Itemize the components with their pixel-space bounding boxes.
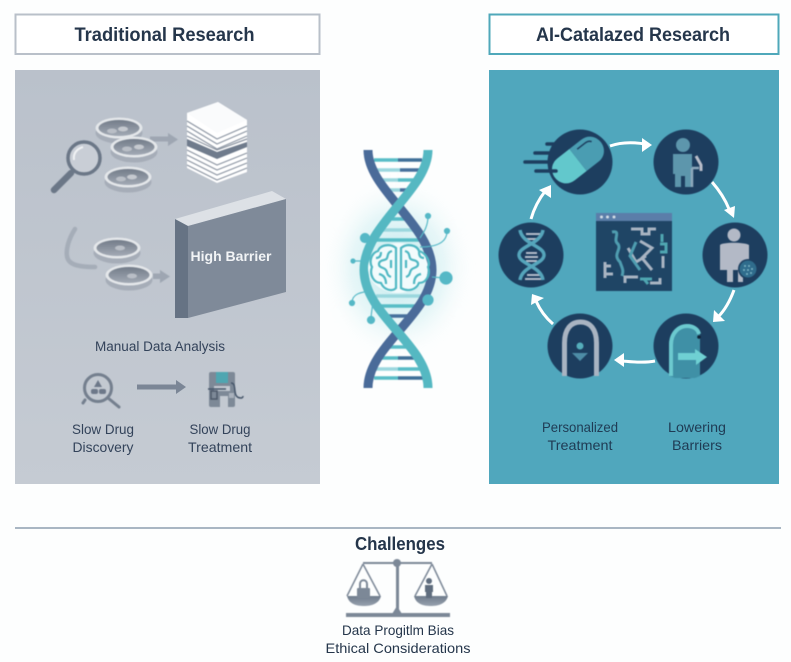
heading: Traditional Research bbox=[16, 14, 320, 54]
icon: DNA bbox=[498, 222, 564, 288]
icon: personalized treatment arch bbox=[548, 314, 612, 378]
icon: petri dishes and magnifier bbox=[54, 118, 178, 192]
label: Slow Drug Treatment: Treatment bbox=[188, 439, 252, 455]
icon: brain bbox=[368, 243, 429, 293]
label: Data Progitlm Bias: Data Progitlm Bias bbox=[342, 622, 454, 638]
label: Manual Data Analysis: Manual Data Analysis bbox=[95, 339, 225, 354]
panel: traditional research bbox=[15, 70, 320, 484]
icon: high barrier block bbox=[175, 191, 286, 318]
cycle arrows bbox=[531, 143, 734, 362]
label: Ethical Considerations: Ethical Considerations bbox=[326, 640, 470, 656]
strand: teal bbox=[364, 150, 428, 388]
icon: balance scale bbox=[346, 559, 450, 617]
label: Lowering Barriers: Lowering bbox=[668, 419, 726, 435]
label: Personalized Treatment: Personalized bbox=[542, 419, 618, 435]
arrow: discovery to treatment bbox=[137, 380, 186, 394]
label: Slow Drug Discovery: Discovery bbox=[72, 439, 134, 455]
icon: lowering barriers arch bbox=[654, 314, 718, 378]
heading: AI-Catalazed Research: AI-Catalazed Research bbox=[536, 24, 730, 46]
label: Personalized Treatment: Treatment bbox=[548, 437, 613, 453]
illustration: DNA helix with brain bbox=[320, 150, 476, 388]
label: High Barrier: High Barrier bbox=[190, 248, 272, 264]
label: Lowering Barriers: Barriers bbox=[672, 437, 722, 453]
icon: person with cane bbox=[654, 130, 718, 194]
label: Slow Drug Treatment: Slow Drug bbox=[190, 421, 250, 437]
heading: Challenges: Challenges bbox=[355, 534, 445, 554]
icon: paper stack bbox=[187, 102, 247, 183]
icon: pill bbox=[525, 130, 612, 194]
heading: Traditional Research: Traditional Research bbox=[74, 24, 254, 46]
nodes: neural connections bbox=[350, 214, 452, 324]
label: Slow Drug Discovery: Slow Drug bbox=[72, 421, 134, 437]
divider bbox=[15, 527, 781, 529]
icon: treatment device bbox=[208, 372, 243, 407]
panel: AI-catalyzed research bbox=[489, 70, 779, 484]
icon: curved tube and dishes bbox=[67, 229, 170, 290]
heading: AI-Catalazed Research bbox=[490, 14, 778, 54]
strand: navy bbox=[368, 150, 432, 388]
icon: central AI window bbox=[596, 213, 672, 291]
icon: discovery magnifier bbox=[83, 374, 119, 407]
icon: person with data badge bbox=[702, 222, 768, 288]
